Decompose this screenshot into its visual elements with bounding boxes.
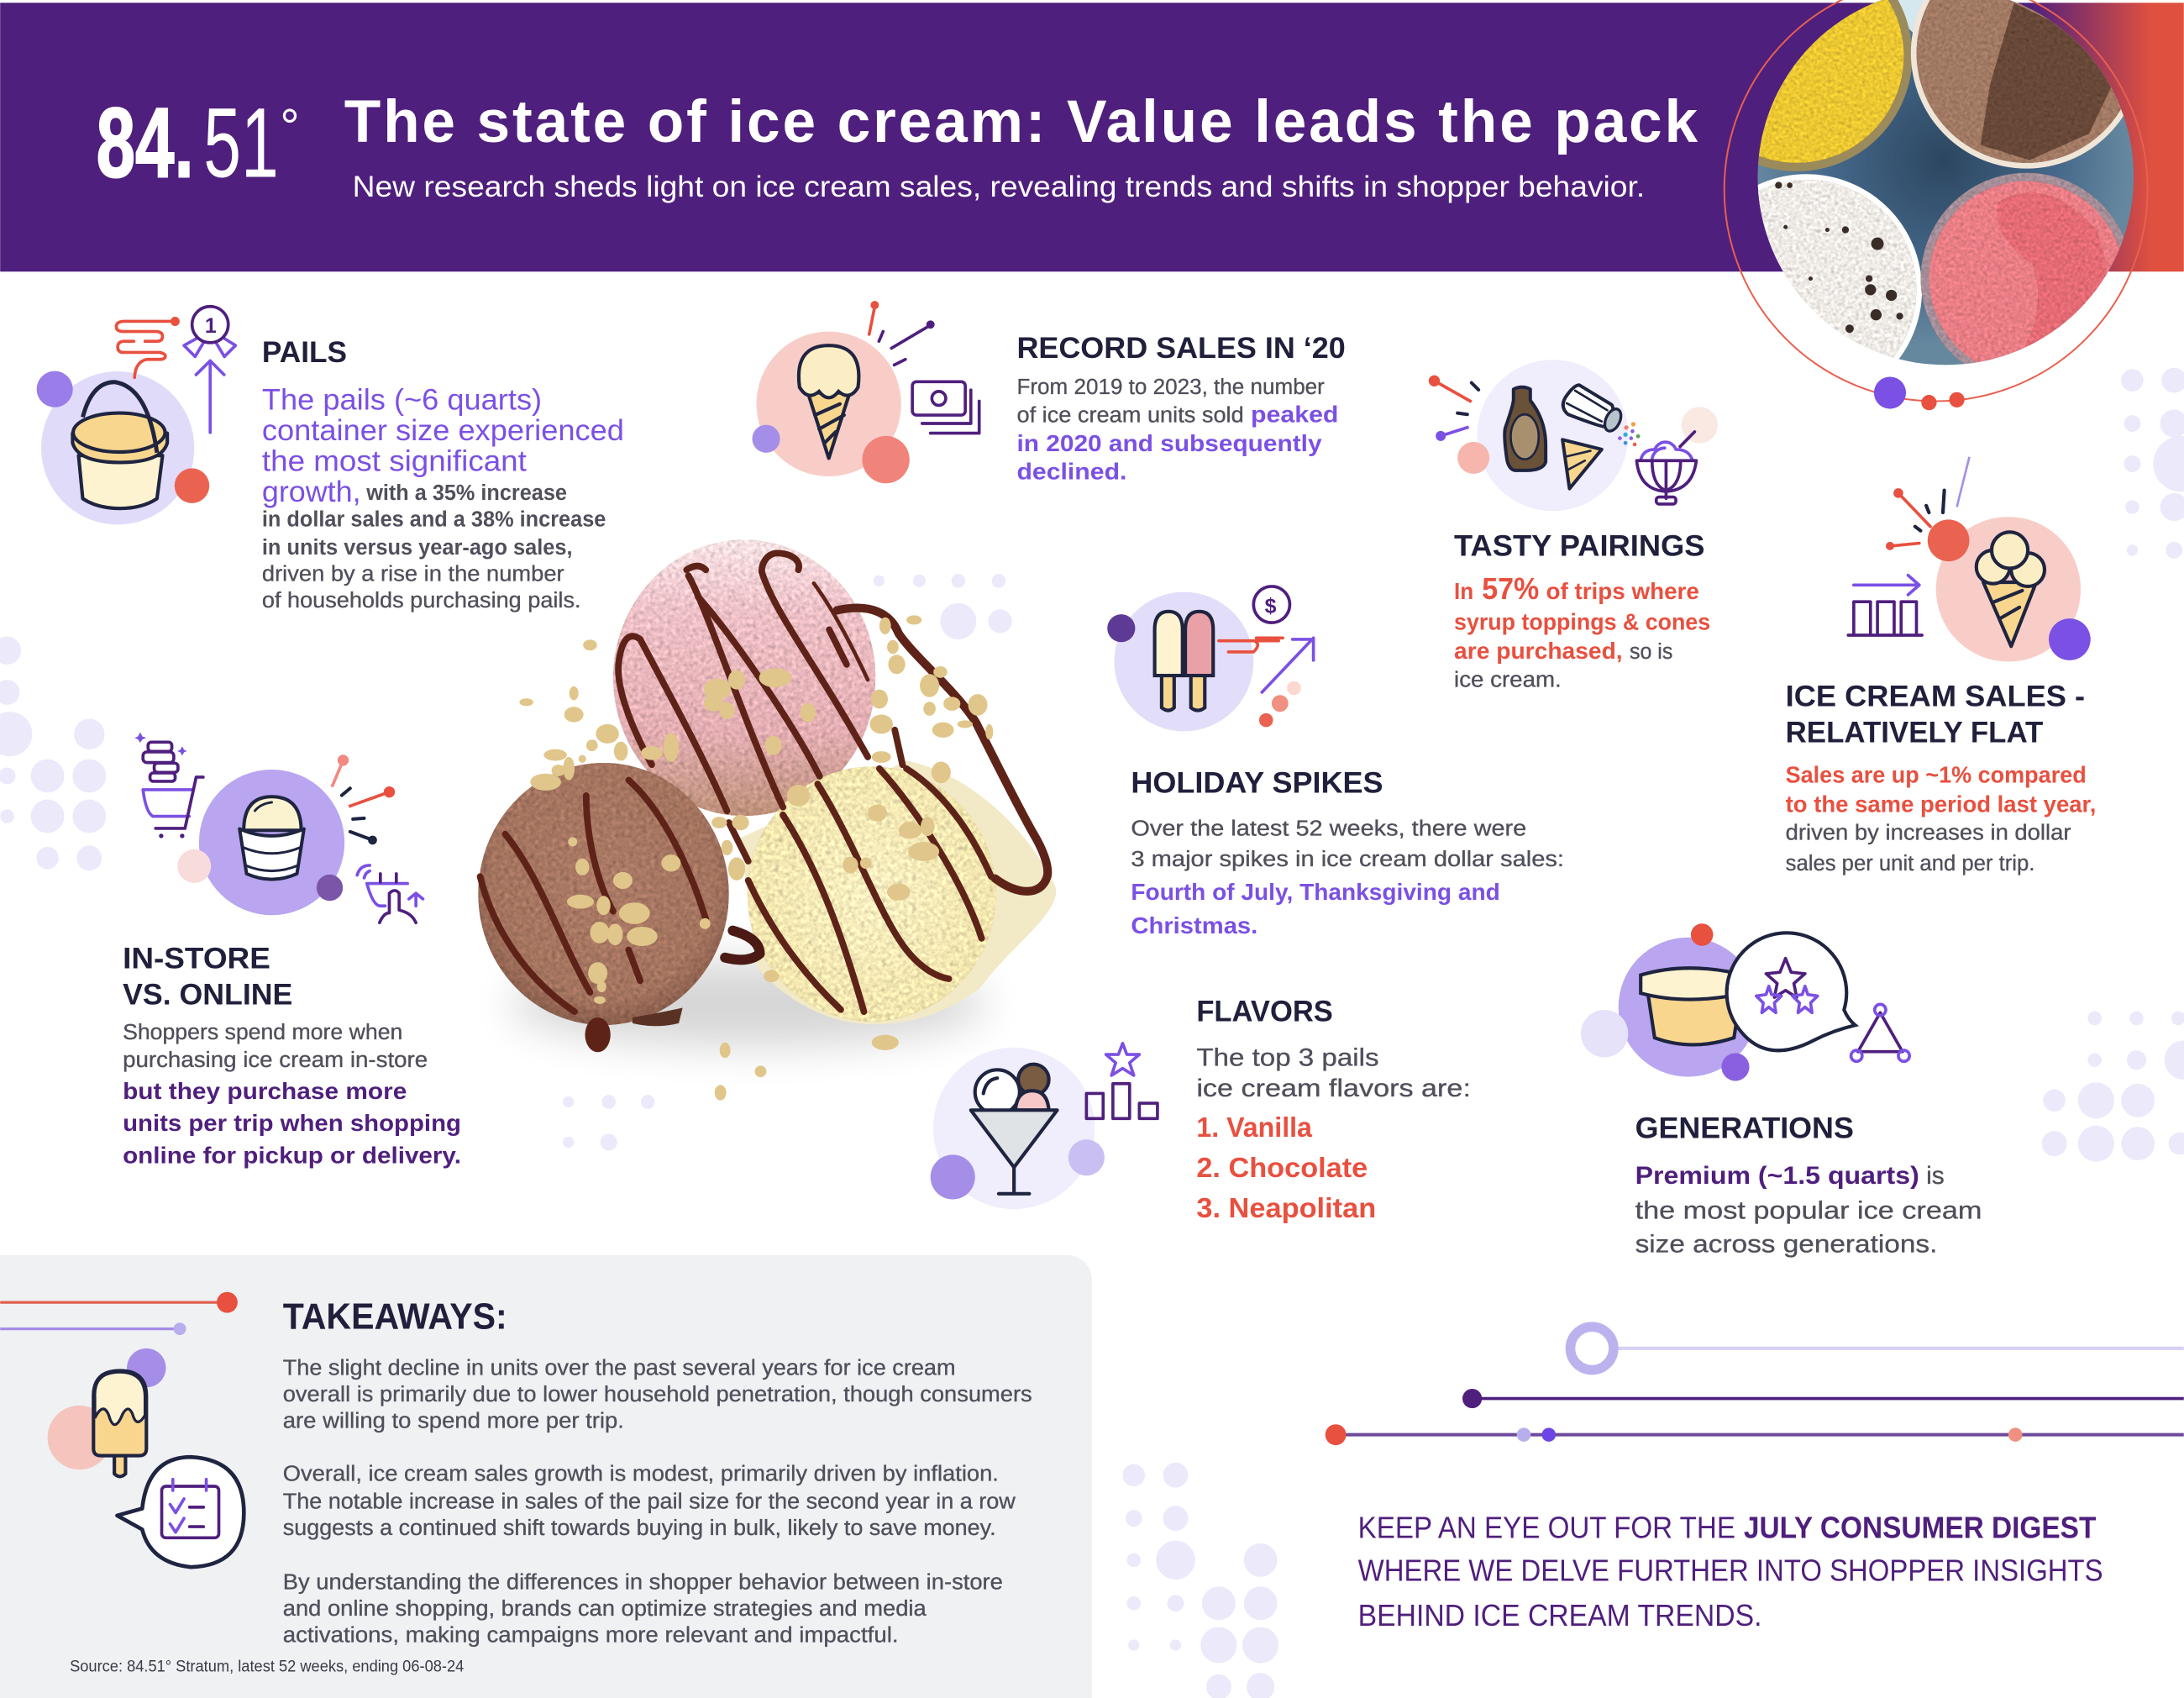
heading: holiday spikes: HOLIDAY SPIKES bbox=[1131, 766, 1383, 799]
text: tasty pairings body: syrup toppings & cones bbox=[1454, 607, 1710, 634]
text: in-store vs online body: but they purchase more bbox=[123, 1077, 407, 1104]
heading: generations: GENERATIONS bbox=[1635, 1112, 1854, 1145]
icon: triple scoop cone with bars bbox=[1848, 457, 2091, 662]
text: record sales body: From 2019 to 2023, the number bbox=[1016, 376, 1325, 399]
text: takeaways paragraph 3: By understanding the differences in shopper behavior between in-store bbox=[283, 1571, 1003, 1595]
callout: july consumer digest: KEEP AN EYE OUT FOR THE bbox=[1358, 1510, 1735, 1544]
logo: 84.51: ° bbox=[280, 98, 300, 155]
text: pails body bbox=[262, 383, 624, 612]
panel: takeaways bbox=[0, 1255, 1092, 1698]
source note: Source: 84.51° Stratum, latest 52 weeks, ending 06-08-24 bbox=[70, 1658, 465, 1675]
heading: ice cream sales: ICE CREAM SALES - bbox=[1786, 681, 2085, 713]
text: holiday spikes body: 3 major spikes in ice cream dollar sales: bbox=[1131, 848, 1564, 871]
icon: sundae glass with star and bars bbox=[931, 1044, 1158, 1209]
heading: in-store vs online: VS. ONLINE bbox=[123, 978, 292, 1011]
text: in-store vs online body: purchasing ice cream in-store bbox=[123, 1049, 428, 1072]
text: in-store vs online body bbox=[123, 1021, 461, 1168]
text: ice cream sales body: sales per unit and per trip. bbox=[1786, 852, 2034, 875]
text: flavors body: 1. Vanilla bbox=[1196, 1112, 1312, 1143]
heading: pails: PAILS bbox=[262, 336, 347, 369]
text: record sales body: peaked bbox=[1251, 400, 1338, 427]
text: takeaways paragraph 3 bbox=[283, 1571, 1003, 1648]
icon: syrup, toppings and sundae bbox=[1429, 360, 1718, 511]
logo: 84.51: 84. bbox=[97, 87, 194, 198]
text: holiday spikes body: Christmas. bbox=[1131, 912, 1257, 938]
text: takeaways paragraph 1 bbox=[283, 1356, 1032, 1433]
text: generations body: Premium (~1.5 quarts) bbox=[1635, 1162, 1919, 1190]
subtitle: New research sheds light on ice cream sales, revealing trends and shifts in shopper behavior. bbox=[353, 171, 1645, 203]
heading: ice cream sales: RELATIVELY FLAT bbox=[1786, 717, 2043, 749]
text: pails body: with a 35% increase bbox=[365, 481, 567, 505]
text: tasty pairings body: ice cream. bbox=[1454, 668, 1562, 691]
text: flavors body: 3. Neapolitan bbox=[1196, 1193, 1376, 1224]
text: pails body: in dollar sales and a 38% increase bbox=[262, 508, 606, 532]
text: pails body: in units versus year-ago sales, bbox=[262, 536, 573, 560]
header photo: four ice cream tubs bbox=[1724, 0, 2149, 410]
text: tasty pairings body: 57% bbox=[1482, 571, 1539, 606]
text: record sales body: of ice cream units sold bbox=[1016, 403, 1244, 427]
dot pattern: left bbox=[0, 637, 106, 870]
central photo: three ice cream scoops with chocolate syrup and nuts bbox=[478, 539, 1056, 1101]
dot pattern: centre bbox=[563, 574, 1012, 1150]
text: takeaways paragraph 2 bbox=[283, 1462, 1016, 1540]
text: ice cream sales body: to the same period last year, bbox=[1786, 791, 2096, 817]
text: flavors body: 2. Chocolate bbox=[1196, 1153, 1368, 1184]
text: takeaways paragraph 2: Overall, ice cream sales growth is modest, primarily driven by inflation. bbox=[283, 1462, 999, 1485]
heading: in-store vs online bbox=[123, 942, 292, 1011]
dot pattern: bottom centre bbox=[1122, 1463, 1278, 1698]
text: tasty pairings body bbox=[1454, 571, 1710, 691]
text: in-store vs online body: Shoppers spend more when bbox=[123, 1021, 402, 1044]
callout: july consumer digest: JULY CONSUMER DIGEST bbox=[1744, 1510, 2096, 1544]
decorative timeline lines: lower right bbox=[1326, 1327, 2184, 1445]
heading: tasty pairings: TASTY PAIRINGS bbox=[1454, 530, 1704, 563]
text: holiday spikes body: Fourth of July, Thanksgiving and bbox=[1131, 878, 1500, 905]
icon: ice cream tub with cart bbox=[134, 733, 423, 923]
text: generations body bbox=[1635, 1162, 1982, 1258]
text: takeaways paragraph 3: and online shopping, brands can optimize strategies and media bbox=[283, 1597, 927, 1621]
heading: in-store vs online: IN-STORE bbox=[123, 942, 270, 975]
text: record sales body bbox=[1016, 376, 1338, 484]
text: flavors body: The top 3 pails bbox=[1196, 1044, 1379, 1071]
text: flavors body: ice cream flavors are: bbox=[1196, 1075, 1471, 1102]
text: holiday spikes body bbox=[1131, 817, 1564, 938]
icon: popsicles with rising arrow: $ bbox=[1265, 594, 1277, 618]
heading: takeaways: TAKEAWAYS: bbox=[283, 1297, 507, 1338]
text: tasty pairings body: of trips where bbox=[1546, 577, 1699, 604]
text: record sales body: in 2020 and subsequently bbox=[1016, 429, 1322, 456]
icon: popsicles with rising arrow bbox=[1107, 586, 1314, 731]
text: pails body: the most significant bbox=[262, 444, 527, 477]
callout: july consumer digest: WHERE WE DELVE FURTHER INTO SHOPPER INSIGHTS bbox=[1358, 1553, 2103, 1588]
logo: 84.51 bbox=[97, 87, 300, 198]
dot pattern: top right bbox=[2121, 368, 2184, 559]
text: takeaways paragraph 1: overall is primarily due to lower household penetration, though consumers bbox=[283, 1383, 1032, 1406]
text: ice cream sales body: Sales are up ~1% compared bbox=[1786, 761, 2087, 788]
icon: tub with star speech bubble bbox=[1581, 923, 1909, 1081]
text: pails body: growth, bbox=[262, 476, 361, 508]
text: pails body: driven by a rise in the number bbox=[262, 562, 564, 586]
text: tasty pairings body: In bbox=[1454, 577, 1473, 604]
dot pattern: lower right bbox=[2042, 1012, 2184, 1162]
logo: 84.51: 51 bbox=[203, 87, 279, 198]
heading: ice cream sales bbox=[1786, 681, 2085, 749]
text: takeaways paragraph 1: The slight decline in units over the past several years for ice cream bbox=[283, 1356, 956, 1380]
icon: ice cream cone with money bbox=[752, 301, 979, 483]
text: ice cream sales body: driven by increases in dollar bbox=[1786, 822, 2071, 845]
text: takeaways paragraph 2: suggests a continued shift towards buying in bulk, likely to save money. bbox=[283, 1517, 996, 1540]
title: The state of ice cream: Value leads the pack bbox=[344, 88, 1698, 155]
header banner bbox=[0, 3, 2184, 271]
icon: popsicle with checklist bubble bbox=[48, 1348, 244, 1567]
text: generations body: the most popular ice cream bbox=[1635, 1197, 1982, 1225]
text: tasty pairings body: so is bbox=[1630, 640, 1672, 664]
icon: pail: 1 bbox=[205, 314, 217, 338]
text: in-store vs online body: online for pickup or delivery. bbox=[123, 1141, 461, 1168]
text: record sales body: declined. bbox=[1016, 457, 1126, 484]
text: takeaways paragraph 2: The notable increase in sales of the pail size for the second year in a row bbox=[283, 1490, 1016, 1514]
callout: july consumer digest bbox=[1358, 1510, 2103, 1632]
heading: flavors: FLAVORS bbox=[1196, 995, 1333, 1028]
text: pails body: The pails (~6 quarts) bbox=[262, 383, 542, 416]
text: ice cream sales body bbox=[1786, 761, 2096, 875]
heading: record sales: RECORD SALES IN ‘20 bbox=[1016, 332, 1346, 365]
text: pails body: of households purchasing pails. bbox=[262, 589, 581, 612]
text: in-store vs online body: units per trip when shopping bbox=[123, 1109, 461, 1136]
icon: pail bbox=[37, 307, 235, 524]
text: takeaways paragraph 3: activations, making campaigns more relevant and impactful. bbox=[283, 1624, 899, 1648]
text: tasty pairings body: are purchased, bbox=[1454, 637, 1623, 664]
text: holiday spikes body: Over the latest 52 weeks, there were bbox=[1131, 817, 1526, 841]
text: takeaways paragraph 1: are willing to spend more per trip. bbox=[283, 1409, 624, 1433]
text: pails body: container size experienced bbox=[262, 414, 624, 447]
text: generations body: size across generations. bbox=[1635, 1230, 1937, 1258]
decorative timeline lines: takeaways bbox=[0, 1292, 238, 1335]
text: flavors body bbox=[1196, 1044, 1471, 1224]
text: generations body: is bbox=[1926, 1162, 1945, 1190]
callout: july consumer digest: BEHIND ICE CREAM TRENDS. bbox=[1358, 1598, 1761, 1632]
